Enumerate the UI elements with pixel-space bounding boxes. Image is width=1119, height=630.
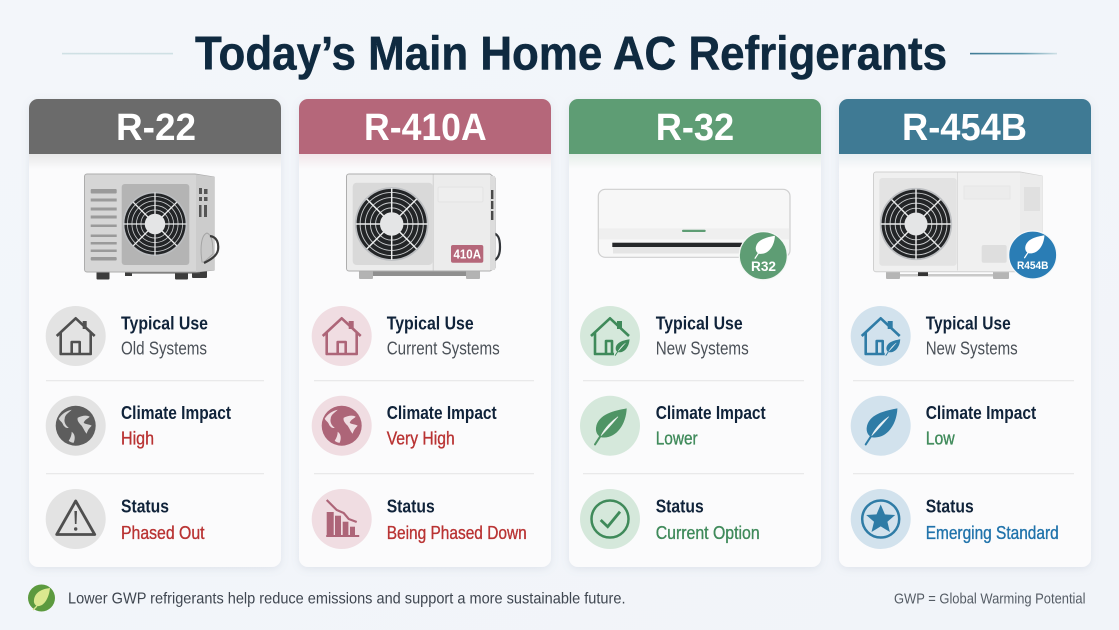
text: climate impact bbox=[656, 402, 766, 448]
text: typical use bbox=[387, 312, 500, 358]
panel: R-410A bbox=[299, 99, 551, 567]
text: typical use bbox=[121, 312, 208, 358]
text: typical use bbox=[926, 312, 1018, 358]
text: climate impact: Very High bbox=[387, 428, 455, 448]
text: status: Status bbox=[387, 495, 435, 516]
outdoor AC unit bbox=[346, 174, 500, 279]
text: climate impact: Climate Impact bbox=[656, 402, 766, 423]
text: climate impact bbox=[121, 402, 231, 448]
wall-mounted AC unit bbox=[598, 189, 790, 280]
text: status bbox=[121, 495, 204, 543]
header: R-22: R-22 bbox=[116, 107, 196, 149]
header: R-410A bbox=[299, 99, 551, 169]
text: typical use bbox=[656, 312, 749, 358]
title rule right bbox=[970, 53, 1057, 54]
icon: star circle bbox=[851, 489, 911, 549]
header: R-454B: R-454B bbox=[902, 107, 1027, 149]
title rule left bbox=[62, 53, 173, 54]
panel: R-32 bbox=[569, 99, 821, 567]
badge: R32: R32 bbox=[751, 259, 776, 274]
row: typical use bbox=[580, 306, 749, 366]
icon: house with leaf bbox=[851, 306, 911, 366]
text: status: Phased Out bbox=[121, 523, 204, 543]
text: climate impact: Climate Impact bbox=[121, 402, 231, 423]
row: typical use bbox=[851, 306, 1018, 366]
icon: warning bbox=[46, 489, 106, 549]
text: typical use: Typical Use bbox=[926, 312, 1011, 333]
text: typical use: Typical Use bbox=[656, 312, 743, 333]
text: typical use: Old Systems bbox=[121, 338, 207, 358]
text: status: Status bbox=[656, 495, 704, 516]
badge: R454B: R454B bbox=[1017, 260, 1049, 272]
text: climate impact bbox=[926, 402, 1036, 448]
header: R-32: R-32 bbox=[656, 107, 734, 149]
icon: globe bbox=[46, 396, 106, 456]
icon: declining bars bbox=[312, 489, 372, 549]
footer message: Lower GWP refrigerants help reduce emissions and support a more sustainable future. bbox=[68, 590, 626, 607]
GWP definition: GWP = Global Warming Potential bbox=[894, 590, 1086, 607]
text: status bbox=[387, 495, 527, 543]
row: climate impact bbox=[851, 396, 1036, 456]
text: climate impact: Climate Impact bbox=[387, 402, 497, 423]
text: status bbox=[656, 495, 760, 543]
header: R-454B bbox=[839, 99, 1091, 169]
badge: R454B bbox=[1009, 231, 1057, 279]
row: status bbox=[46, 489, 204, 549]
icon: leaf bbox=[851, 396, 911, 456]
row: status bbox=[851, 489, 1059, 549]
panel: R-22 bbox=[29, 99, 281, 567]
row: status bbox=[580, 489, 760, 549]
row: climate impact bbox=[312, 396, 497, 456]
panel: R-454B bbox=[839, 99, 1091, 567]
outdoor AC unit bbox=[874, 172, 1057, 279]
text: typical use: New Systems bbox=[656, 338, 749, 358]
footer note bbox=[28, 584, 626, 612]
icon: check circle bbox=[580, 489, 640, 549]
row: typical use bbox=[312, 306, 500, 366]
text: status: Being Phased Down bbox=[387, 523, 527, 543]
icon: globe bbox=[312, 396, 372, 456]
icon: house with leaf bbox=[580, 306, 640, 366]
title text: Today’s Main Home AC Refrigerants bbox=[195, 26, 947, 80]
icon: leaf bbox=[580, 396, 640, 456]
text: climate impact: Low bbox=[926, 428, 956, 448]
text: status: Status bbox=[121, 495, 169, 516]
outdoor AC unit bbox=[84, 174, 218, 280]
icon: footer leaf bbox=[28, 584, 55, 612]
text: status bbox=[926, 495, 1059, 543]
text: climate impact: High bbox=[121, 428, 154, 448]
icon: house bbox=[46, 306, 106, 366]
text: climate impact bbox=[387, 402, 497, 448]
badge: R32 bbox=[739, 232, 787, 280]
row: climate impact bbox=[580, 396, 766, 456]
text: typical use: New Systems bbox=[926, 338, 1018, 358]
icon: house bbox=[312, 306, 372, 366]
header: R-32 bbox=[569, 99, 821, 169]
badge: 410A: 410A bbox=[454, 248, 481, 262]
text: climate impact: Climate Impact bbox=[926, 402, 1036, 423]
row: status bbox=[312, 489, 527, 549]
text: typical use: Typical Use bbox=[387, 312, 474, 333]
row: climate impact bbox=[46, 396, 231, 456]
text: status: Status bbox=[926, 495, 974, 516]
text: climate impact: Lower bbox=[656, 428, 698, 448]
text: status: Emerging Standard bbox=[926, 523, 1059, 543]
row: typical use bbox=[46, 306, 208, 366]
header: R-22 bbox=[29, 99, 281, 169]
text: typical use: Current Systems bbox=[387, 338, 500, 358]
text: status: Current Option bbox=[656, 523, 760, 543]
header: R-410A: R-410A bbox=[364, 107, 487, 149]
text: typical use: Typical Use bbox=[121, 312, 208, 333]
